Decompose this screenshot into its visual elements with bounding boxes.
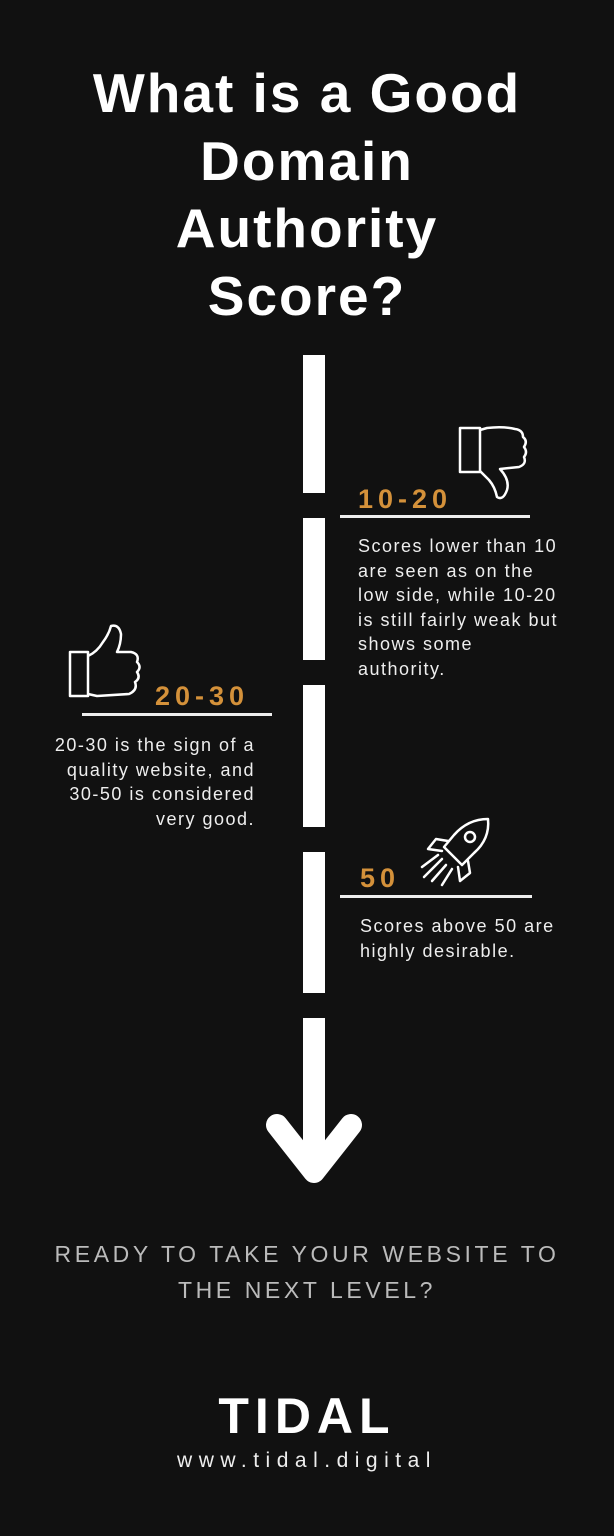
text 10-20: low side, while 10-20 [358,585,557,605]
label 20-30: 20-30 [155,681,249,711]
arrow head [266,1114,362,1183]
icon: rocket [420,818,490,886]
label 50: 50 [360,863,400,893]
text 10-20 [358,536,558,679]
title: What is a Good [93,62,521,124]
icon: thumbs up [68,624,141,698]
logo: TIDAL [218,1388,396,1444]
text 20-30: 20-30 is the sign of a [55,735,255,755]
timeline [303,355,325,1154]
title [92,62,521,326]
title: Score? [208,264,406,326]
text 10-20: authority. [358,658,446,678]
text 50: highly desirable. [360,940,516,960]
text 10-20: Scores lower than 10 [358,536,557,556]
url: www.tidal.digital [177,1449,437,1472]
text 20-30: 30-50 is considered [69,784,255,804]
text 20-30 [55,735,255,829]
title: Authority [176,197,438,259]
call to action: THE NEXT LEVEL? [178,1277,436,1303]
text 10-20: shows some [358,634,473,654]
text 50 [360,916,555,961]
label 10-20: 10-20 [358,484,452,514]
icon: thumbs down [458,426,528,500]
text 50: Scores above 50 are [360,916,555,936]
title: Domain [200,130,414,192]
call to action [55,1241,559,1303]
call to action: READY TO TAKE YOUR WEBSITE TO [55,1241,559,1267]
text 20-30: quality website, and [67,760,255,780]
text 20-30: very good. [156,808,255,828]
text 10-20: are seen as on the [358,560,534,580]
text 10-20: is still fairly weak but [358,610,558,630]
